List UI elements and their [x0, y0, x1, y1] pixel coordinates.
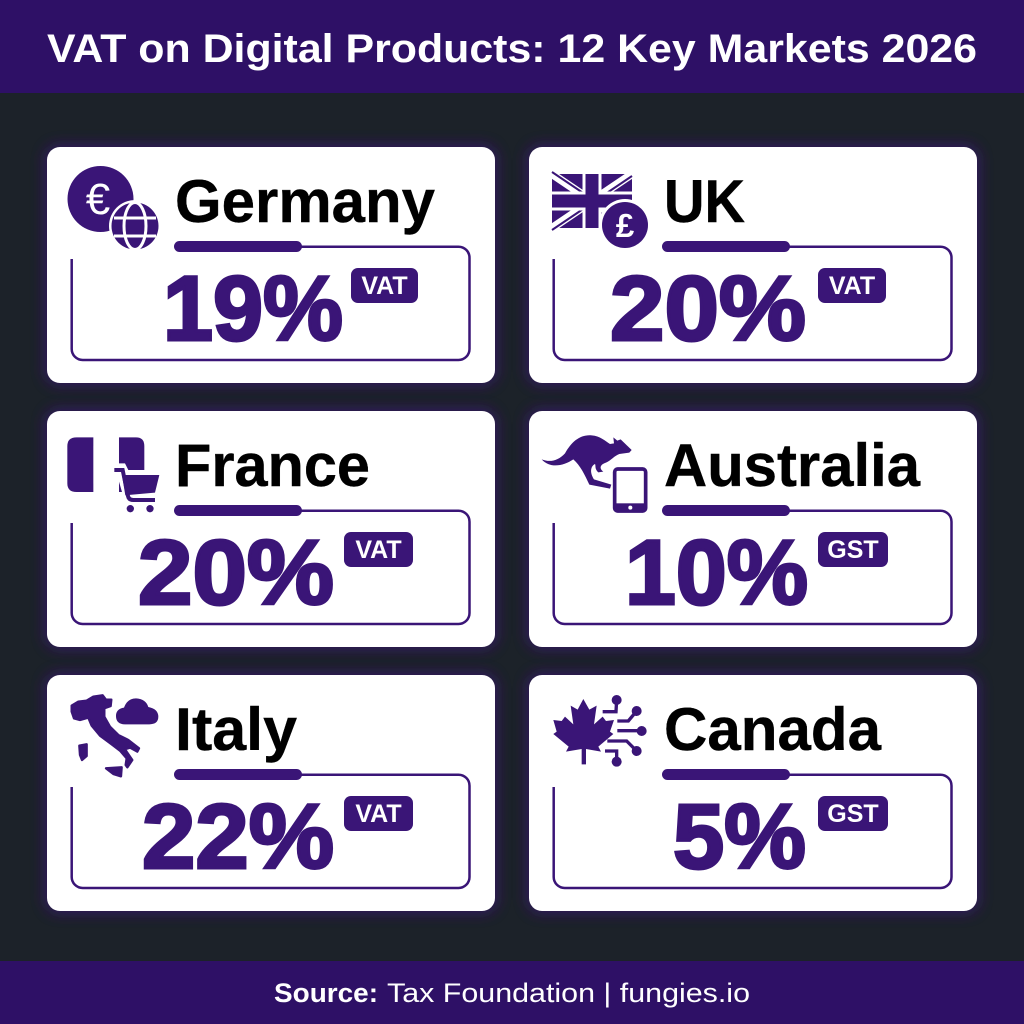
panel: Australia	[527, 409, 979, 649]
panel: France	[45, 409, 497, 649]
rate: 20%	[138, 522, 334, 624]
panel: UK	[527, 145, 979, 385]
tax badge	[344, 796, 413, 831]
tax badge	[818, 532, 888, 567]
country name: France	[175, 432, 370, 499]
icon: union flag and pound coin	[552, 172, 651, 251]
icon: kangaroo and tablet	[542, 435, 646, 511]
rate frame	[554, 775, 952, 888]
tax badge: VAT	[829, 272, 875, 300]
tax badge: GST	[827, 536, 879, 564]
rate frame	[72, 775, 469, 888]
icon: maple leaf with circuit	[553, 695, 647, 767]
source footer	[0, 961, 1024, 1024]
accent bar	[662, 241, 790, 252]
title banner: VAT on Digital Products: 12 Key Markets 2026	[47, 27, 977, 71]
tax badge: GST	[827, 800, 879, 828]
tax badge	[351, 268, 418, 303]
rate: 19%	[163, 258, 343, 360]
accent bar	[662, 505, 790, 516]
icon: euro coin and globe: €	[86, 175, 110, 224]
tax badge: VAT	[355, 800, 402, 828]
rate frame	[72, 511, 469, 624]
panel: Italy	[45, 673, 497, 913]
tax badge	[818, 796, 888, 831]
country name: Canada	[664, 696, 882, 763]
tax badge: VAT	[361, 272, 408, 300]
source footer: Tax Foundation | fungies.io	[387, 978, 750, 1008]
country name: Australia	[664, 432, 921, 499]
rate frame	[554, 511, 952, 624]
accent bar	[174, 505, 302, 516]
country name: UK	[664, 168, 745, 235]
rate: 22%	[142, 786, 334, 888]
source footer: Source:	[274, 978, 378, 1008]
icon: map of Italy and cloud	[72, 695, 158, 776]
accent bar	[174, 241, 302, 252]
icon: French flag bands and cart	[67, 437, 159, 512]
panel: Germany	[45, 145, 497, 385]
icon: euro coin and globe	[68, 166, 161, 252]
icon: union flag and pound coin: £	[616, 207, 635, 244]
accent bar	[174, 769, 302, 780]
country name: Germany	[175, 168, 436, 235]
rate frame	[554, 247, 952, 360]
accent bar	[662, 769, 790, 780]
tax badge	[344, 532, 413, 567]
rate: 10%	[625, 522, 808, 624]
title banner	[0, 0, 1024, 93]
tax badge: VAT	[355, 536, 402, 564]
rate frame	[72, 247, 469, 360]
tax badge	[818, 268, 886, 303]
panel: Canada	[527, 673, 979, 913]
country name: Italy	[175, 696, 298, 763]
rate: 20%	[610, 258, 806, 360]
rate: 5%	[673, 786, 806, 888]
